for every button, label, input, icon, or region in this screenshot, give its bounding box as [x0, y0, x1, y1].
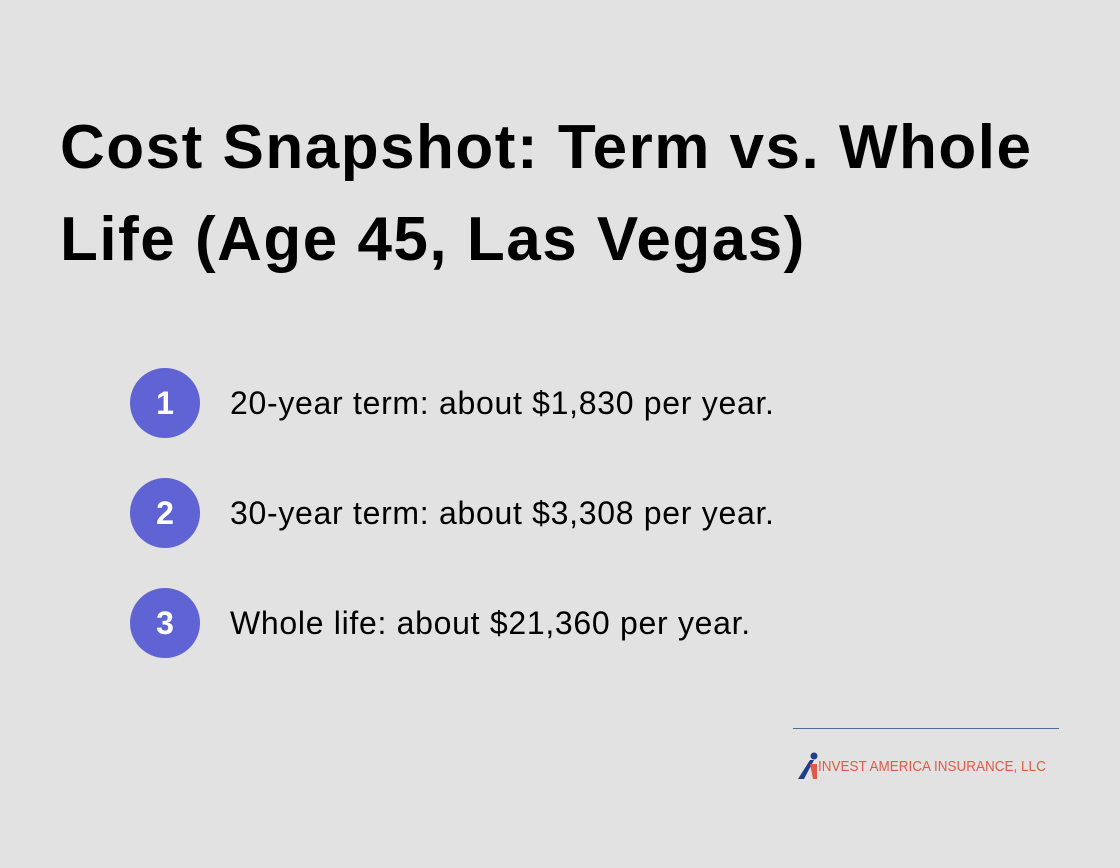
icon: logo mark: [798, 752, 818, 779]
item 1: 1: [156, 385, 174, 421]
item 2: 30-year term: about $3,308 per year.: [230, 495, 775, 531]
title: Life (Age 45, Las Vegas): [60, 205, 806, 274]
item 1: [130, 368, 775, 438]
item 3: [130, 588, 751, 658]
item 2: 2: [156, 495, 174, 531]
item 1: 20-year term: about $1,830 per year.: [230, 385, 775, 421]
title: Cost Snapshot: Term vs. Whole: [60, 113, 1032, 182]
logo: INVEST AMERICA INSURANCE, LLC: [818, 758, 1046, 775]
item 2: [130, 478, 775, 548]
item 3: Whole life: about $21,360 per year.: [230, 605, 751, 641]
logo: [798, 752, 1046, 779]
title: [60, 113, 1032, 274]
item 3: 3: [156, 605, 174, 641]
